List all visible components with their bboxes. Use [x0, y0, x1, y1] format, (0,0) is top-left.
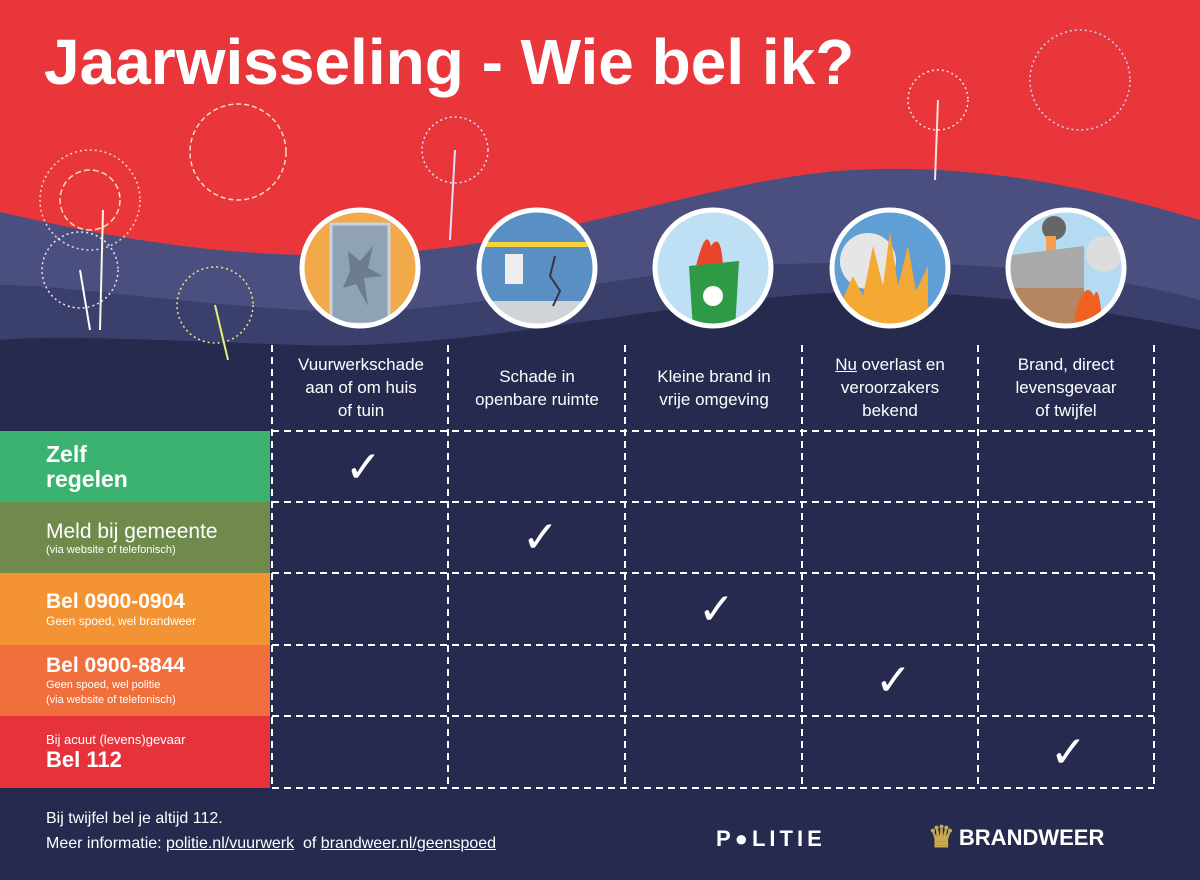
row: 0900-0904 [0, 573, 270, 645]
logo: brandweer: ♛ [928, 821, 955, 854]
column headers: aan of om huis [305, 378, 417, 397]
icon: broken window [300, 208, 420, 328]
row: 0900-8844: Geen spoed, wel politie [46, 678, 160, 690]
text: of twijfel [1035, 401, 1097, 420]
row: zelf regelen [0, 431, 270, 502]
text: ✓ [522, 512, 559, 563]
title: Jaarwisseling - Wie bel ik? [44, 26, 854, 98]
text: Nu overlast en [835, 355, 945, 374]
row: zelf regelen: regelen [46, 466, 128, 492]
text: Schade in [499, 366, 575, 386]
logo: brandweer [928, 821, 1104, 854]
row: zelf regelen: Zelf [46, 440, 87, 466]
footer text: Bij twijfel bel je altijd 112. [46, 810, 223, 827]
row: gemeente: (via website of telefonisch) [46, 544, 176, 556]
icon: burning house [1006, 208, 1126, 328]
footer text [46, 810, 496, 852]
row: 0900-8844 [0, 645, 270, 716]
row: 112: Bel 112 [46, 746, 122, 772]
icon: explosion [830, 208, 950, 328]
row: gemeente: Meld bij gemeente [46, 520, 218, 542]
logo: brandweer: BRANDWEER [959, 824, 1104, 850]
column headers: Vuurwerkschade [298, 355, 424, 374]
row: 0900-0904: Geen spoed, wel brandweer [46, 614, 196, 628]
text: ✓ [875, 655, 912, 706]
row: 112 [0, 716, 270, 788]
text: Brand, direct [1018, 355, 1114, 374]
row: 0900-8844: (via website of telefonisch) [46, 694, 176, 706]
row: gemeente [0, 502, 270, 573]
column headers [298, 355, 424, 420]
row: 0900-8844: Bel 0900-8844 [46, 654, 185, 676]
text: vrije omgeving [659, 390, 769, 408]
row: 112: Bij acuut (levens)gevaar [46, 732, 185, 746]
text: levensgevaar [1015, 378, 1117, 397]
checkmarks: ✓ [345, 442, 382, 493]
logo: politie: P●LITIE [716, 826, 826, 851]
fireworks [40, 30, 1130, 343]
text: ✓ [698, 584, 735, 635]
column headers: of tuin [338, 401, 384, 420]
icon: bus stop [476, 208, 598, 328]
text: veroorzakers [841, 378, 939, 397]
text: ✓ [1050, 727, 1087, 778]
text: bekend [862, 401, 918, 420]
text: openbare ruimte [475, 390, 599, 408]
row: 0900-0904: Bel 0900-0904 [46, 590, 185, 613]
icon: burning bin [652, 208, 774, 328]
footer text: Meer informatie: politie.nl/vuurwerk of brandweer.nl/geenspoed [46, 835, 496, 852]
text: Kleine brand in [657, 366, 771, 386]
